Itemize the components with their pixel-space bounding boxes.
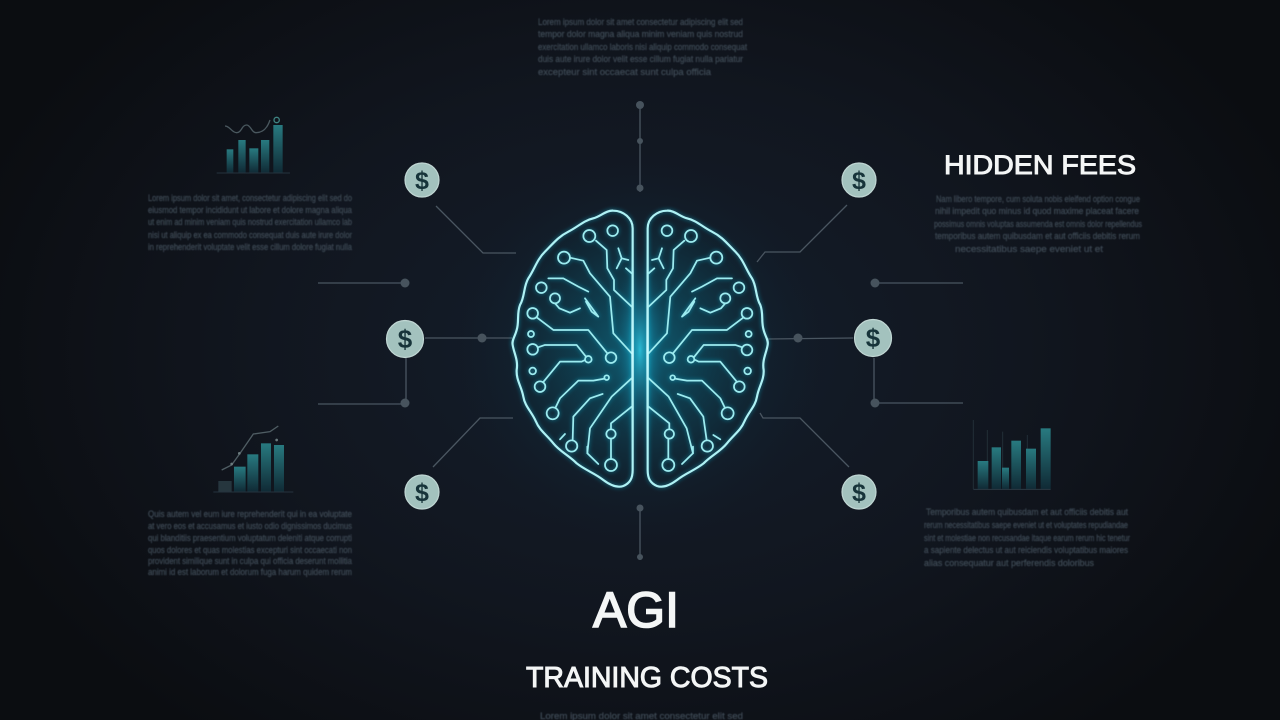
text block: bottom left: animi id est laborum et dolorum fuga harum quidem rerum (148, 567, 352, 577)
chart: bottom right bars (973, 420, 1051, 489)
brain interior fill (512, 211, 768, 487)
title: AGI: AGI (593, 582, 679, 638)
connector: right upper branch (870, 278, 963, 288)
top text block: excepteur sint occaecat sunt culpa officia (538, 67, 711, 77)
text block: bottom right (924, 507, 1130, 568)
bright central walls (632, 240, 648, 460)
connector: left upper branch (318, 278, 410, 288)
left hemisphere (512, 211, 633, 487)
connector: right lower branch (870, 358, 963, 408)
text block: bottom left: qui blanditiis praesentium voluptatum deleniti atque corrupti (148, 533, 352, 543)
text block: bottom right: Temporibus autem quibusdam et aut officiis debitis aut (926, 507, 1128, 517)
text block: hidden fees (934, 194, 1142, 254)
brain glow (440, 150, 840, 550)
connector: left lower branch (318, 358, 410, 408)
chart: bottom left bars (213, 426, 293, 492)
text block: top left: ut enim ad minim veniam quis nostrud exercitation ullamco lab (148, 217, 352, 227)
text block: hidden fees: possimus omnis voluptas assumenda est omnis dolor repellendus (934, 219, 1142, 229)
text block: hidden fees: necessitatibus saepe eveniet ut et (955, 244, 1104, 254)
text block: hidden fees: Nam libero tempore, cum soluta nobis eleifend option congue (936, 194, 1140, 204)
chart: top left bars (217, 117, 290, 173)
icon: dollar coin upper right (842, 163, 876, 197)
central core glow (590, 230, 690, 470)
top text block: duis aute irure dolor velit esse cillum fugiat nulla pariatur (538, 54, 743, 64)
text block: top left (148, 193, 352, 252)
connector: upper right (757, 205, 847, 262)
icon: dollar coin middle left (386, 320, 424, 358)
text block: top left: in reprehenderit voluptate velit esse cillum dolore fugiat nulla (148, 242, 352, 252)
text block: bottom left (148, 509, 352, 577)
text block: bottom left: at vero eos et accusamus et iusto odio dignissimos ducimus (148, 521, 352, 531)
connector: lower left (433, 418, 513, 467)
text block: bottom right: sint et molestiae non recusandae itaque earum rerum hic tenetur (924, 533, 1130, 543)
text block: bottom right: rerum necessitatibus saepe eveniet ut et voluptates repudiandae (924, 520, 1128, 530)
text block: bottom right: alias consequatur aut perferendis doloribus (924, 558, 1094, 568)
right hemisphere (648, 211, 768, 487)
text block: top left: Lorem ipsum dolor sit amet, consectetur adipiscing elit sed do (148, 193, 352, 203)
icon: dollar coin lower left: $ (415, 479, 429, 507)
icon: dollar coin lower right (842, 475, 876, 509)
top text block (538, 17, 747, 77)
icon: circuit brain (512, 211, 768, 487)
subtitle: training costs: TRAINING COSTS (526, 662, 768, 694)
icon: dollar coin upper right: $ (852, 167, 866, 195)
icon: dollar coin lower left (405, 475, 439, 509)
text block: top left: nisi ut aliquip ex ea commodo consequat duis aute irure dolor (148, 230, 352, 240)
text block: bottom left: provident similique sunt in culpa qui officia deserunt mollitia (148, 556, 352, 566)
text block: hidden fees: temporibus autem quibusdam et aut officiis debitis rerum (935, 231, 1140, 241)
icon: dollar coin lower right: $ (852, 479, 866, 507)
icon: dollar coin upper left (405, 163, 439, 197)
title: hidden fees: HIDDEN FEES (944, 150, 1136, 180)
connector: top vertical line (636, 101, 644, 192)
text block: bottom left: quos dolores et quas molestias excepturi sint occaecati non (148, 545, 352, 555)
text block: bottom left: Quis autem vel eum iure reprehenderit qui in ea voluptate (148, 509, 352, 519)
icon: dollar coin middle right (854, 320, 892, 356)
top text block: tempor dolor magna aliqua minim veniam quis nostrud (538, 29, 743, 39)
text block: hidden fees: nihil impedit quo minus id quod maxime placeat facere (935, 206, 1139, 216)
connector: middle left (425, 334, 512, 342)
connector: lower right (760, 413, 849, 467)
icon: dollar coin middle left: $ (398, 324, 413, 354)
icon: dollar coin upper left: $ (415, 167, 429, 195)
text block: top left: eiusmod tempor incididunt ut labore et dolore magna aliqua (148, 205, 352, 215)
top text block: exercitation ullamco laboris nisi aliquip commodo consequat (538, 42, 747, 52)
connector: bottom vertical line (636, 504, 644, 560)
connector: upper left (436, 206, 516, 253)
connector: middle right (768, 334, 853, 342)
top text block: Lorem ipsum dolor sit amet consectetur adipiscing elit sed (538, 17, 743, 27)
icon: dollar coin middle right: $ (866, 323, 881, 353)
text block: bottom right: a sapiente delectus ut aut reiciendis voluptatibus maiores (924, 545, 1128, 555)
